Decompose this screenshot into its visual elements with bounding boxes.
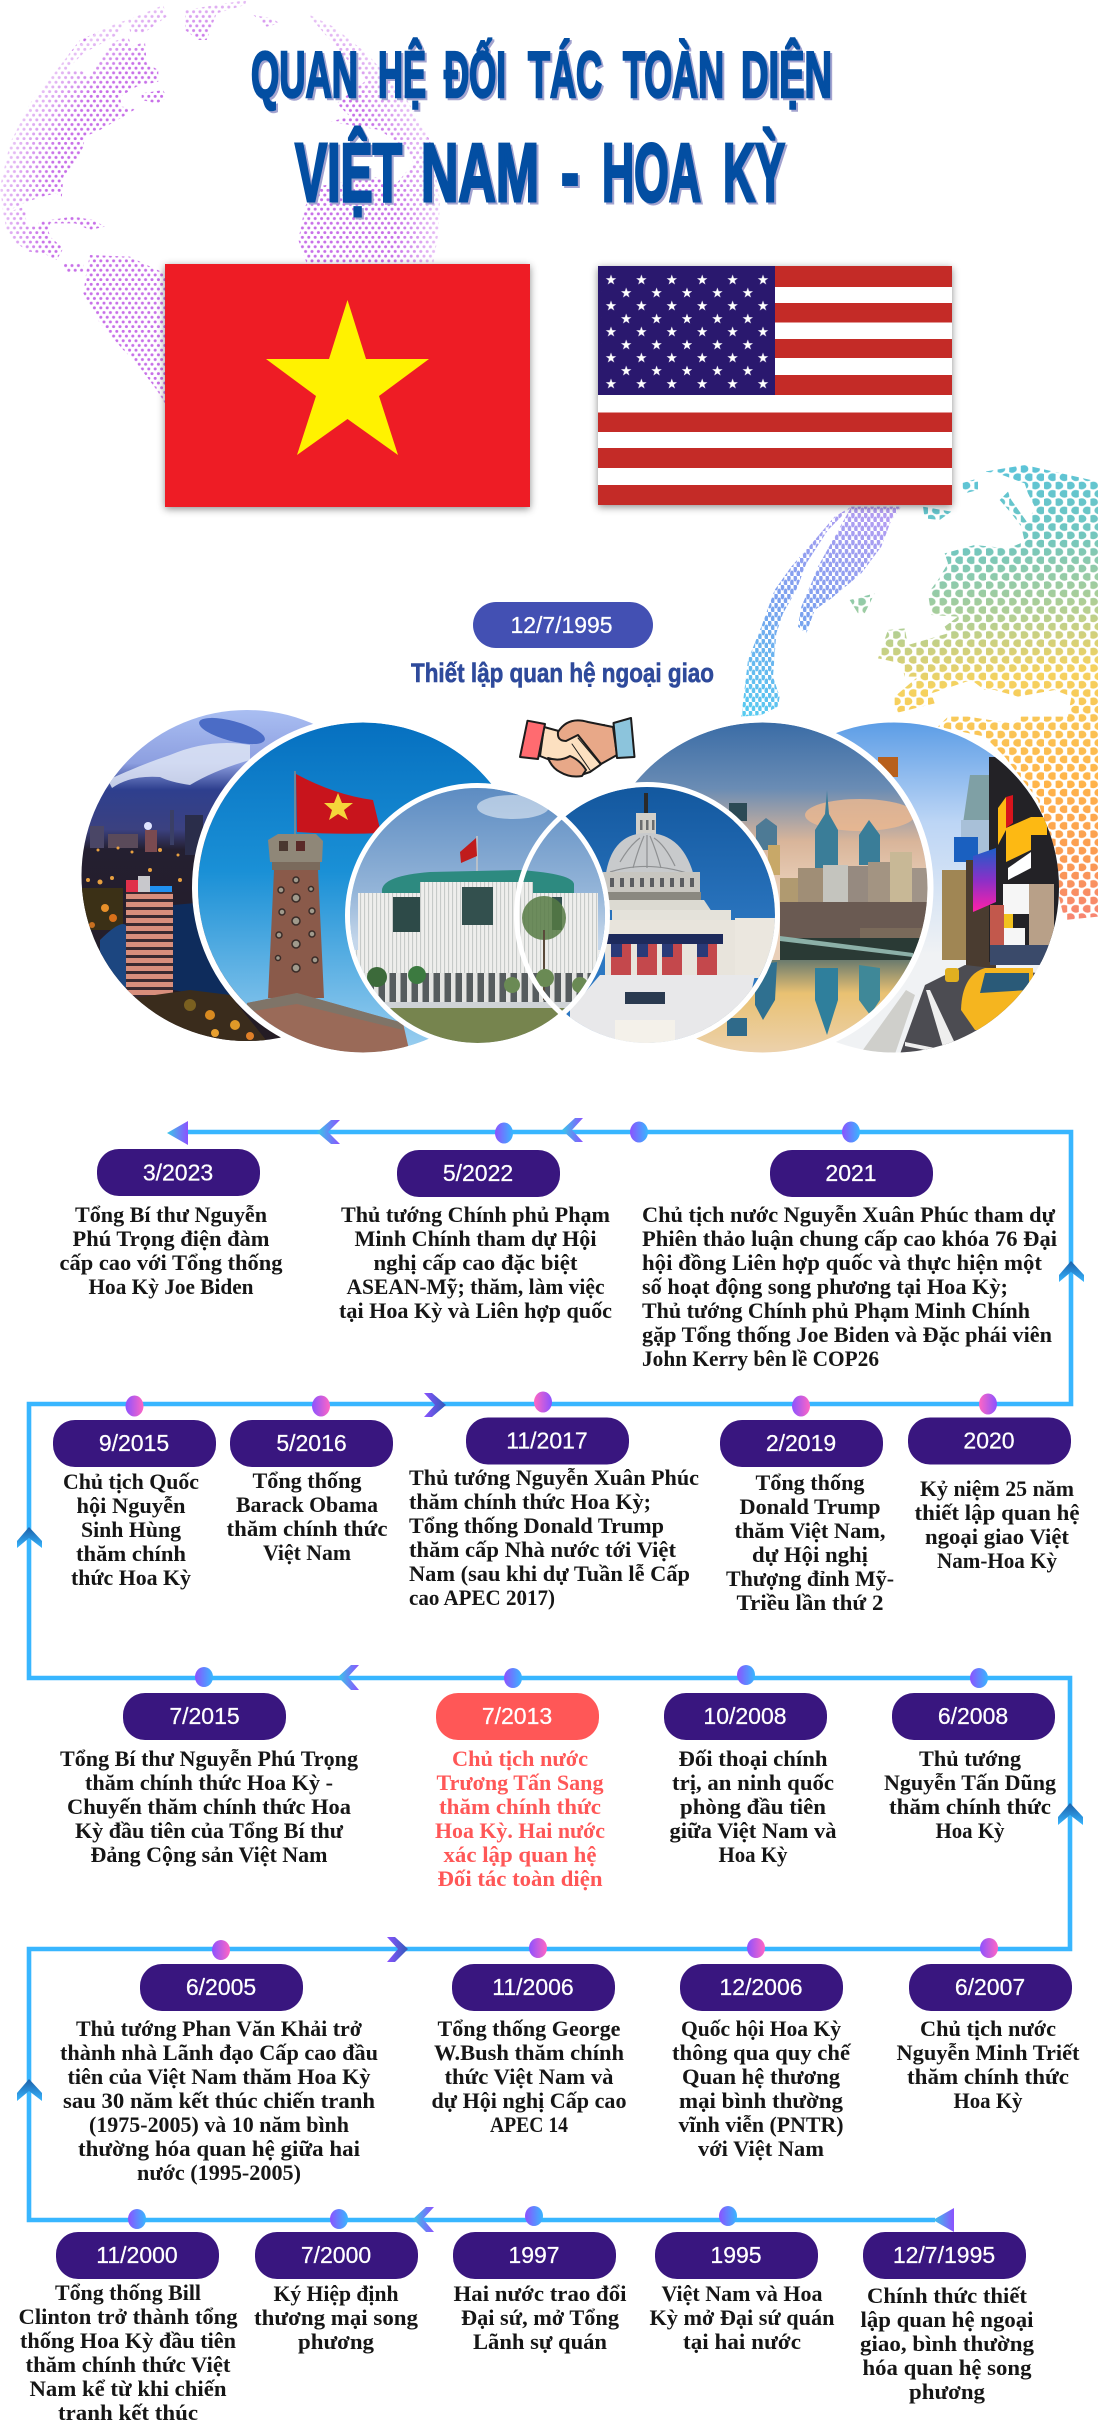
title: ĐỐI [444,38,506,111]
event: 11/2000: 11/2000 [96,2242,178,2268]
event: 10/2008: Hoa Kỳ [718,1842,788,1867]
timeline path [29,1121,1071,2232]
event: 6/2005: thành nhà Lãnh đạo Cấp cao đầu [60,2040,378,2065]
event: 2020: thiết lập quan hệ [914,1500,1080,1525]
event: 11/2017: Thủ tướng Nguyễn Xuân Phúc [409,1465,699,1490]
event: 7/2013 highlighted: thăm chính thức [439,1794,601,1819]
event: 6/2007: Chủ tịch nước [920,2016,1056,2041]
event: 5/2022: ASEAN-Mỹ; thăm, làm việc [346,1274,605,1299]
event: 2020: ngoại giao Việt [925,1524,1070,1549]
event: 7/2000: 7/2000 [301,2242,371,2268]
title: HOA [602,126,701,219]
event: 6/2005: Thủ tướng Phan Văn Khải trở [76,2016,363,2041]
event: 6/2005: sau 30 năm kết thúc chiến tranh [63,2088,375,2113]
icon: handshake [520,718,634,776]
event: 12/7/1995: 12/7/1995 [893,2242,995,2268]
event: 12/7/1995: Chính thức thiết [867,2283,1028,2308]
event: 11/2000: thống Hoa Kỳ đầu tiên [20,2328,236,2353]
event: 7/2015 [60,1693,358,1867]
event: 5/2016: Tổng thống [252,1468,362,1493]
event: 11/2000: Tổng thống Bill [55,2280,201,2305]
event: 9/2015 [53,1420,216,1590]
event: 2021: 2021 [825,1160,877,1186]
event: 2020: Nam-Hoa Kỳ [937,1548,1057,1573]
event: 12/2006: mại bình thường [679,2088,843,2113]
event: 11/2017: Nam (sau khi dự Tuần lễ Cấp [409,1561,690,1586]
event: 11/2017: thăm chính thức Hoa Kỳ; [409,1489,651,1514]
event: 10/2008: giữa Việt Nam và [670,1818,836,1843]
event: 9/2015: Chủ tịch Quốc [63,1469,199,1494]
event: 6/2007: 6/2007 [955,1974,1025,2000]
event: 5/2022: nghị cấp cao đặc biệt [374,1250,578,1275]
event: 1997: Lãnh sự quán [473,2329,607,2354]
event: 2021: Chủ tịch nước Nguyễn Xuân Phúc tham dự [642,1202,1056,1227]
event: 6/2005 [60,1964,378,2185]
event: 5/2022: tại Hoa Kỳ và Liên hợp quốc [339,1298,612,1323]
arrow: start head row 1 [167,1121,188,1145]
event: 11/2017: Tổng thống Donald Trump [409,1513,664,1538]
event: 7/2013 highlighted: Đối tác toàn diện [438,1866,602,1891]
event: 5/2016: thăm chính thức [226,1516,388,1541]
event: 2/2019: Donald Trump [740,1494,880,1519]
event: 7/2000: Ký Hiệp định [274,2281,398,2306]
event: 7/2013 highlighted: xác lập quan hệ [444,1842,597,1867]
event: 6/2007: Nguyễn Minh Triết [896,2040,1080,2065]
date pill: 12/7/1995: 12/7/1995 [510,612,612,638]
event: 7/2013 highlighted: Chủ tịch nước [452,1746,588,1771]
event: 9/2015: thức Hoa Kỳ [71,1565,191,1590]
event: 9/2015: Sinh Hùng [81,1517,181,1542]
photo rings [348,784,778,1046]
event: 12/7/1995: hóa quan hệ song [862,2355,1032,2380]
photo: US Capitol [562,787,775,1043]
event: 2021: John Kerry bên lề COP26 [642,1346,879,1371]
event: 12/2006: thông qua quy chế [672,2040,851,2065]
flag: United States [598,266,952,505]
photo: Vietnam National Assembly [350,788,606,1044]
event: 11/2000: Clinton trở thành tổng [18,2304,237,2329]
photo ring [195,720,531,1056]
event: 11/2006: 11/2006 [492,1974,574,2000]
event: 2021: hội đồng Liên hợp quốc và thực hiện một [642,1250,1043,1275]
event: 5/2016 [226,1420,393,1565]
event: 2/2019: dự Hội nghị [752,1542,868,1567]
chevrons along timeline [17,1118,1084,2232]
event: 12/7/1995: lập quan hệ ngoại [860,2307,1034,2332]
event: 11/2006: Tổng thống George [438,2016,621,2041]
event: 1997: 1997 [508,2242,560,2268]
event: 7/2015: Kỳ đầu tiên của Tổng Bí thư [75,1818,344,1843]
event: 10/2008: 10/2008 [703,1703,787,1729]
event: 12/7/1995 [860,2232,1034,2404]
event: 2/2019: Thượng đỉnh Mỹ- [726,1566,894,1591]
title: - [561,126,579,219]
title: VIỆT [295,126,402,219]
event: 2/2019: 2/2019 [766,1430,836,1456]
event: 6/2008: thăm chính thức [889,1794,1051,1819]
event: 12/2006: Quan hệ thương [682,2064,840,2089]
event: 9/2015: hội Nguyễn [76,1493,186,1518]
event: 7/2000 [254,2232,418,2354]
event: 12/2006: vĩnh viễn (PNTR) [678,2112,844,2137]
event: 1997 [453,2232,626,2354]
title: TOÀN [623,38,724,111]
event: 6/2005: nước (1995-2005) [137,2160,301,2185]
event: 9/2015: 9/2015 [99,1430,169,1456]
event: 5/2022 [339,1150,612,1323]
event: 2/2019: Tổng thống [756,1470,864,1495]
background dotted globe: purple [0,0,440,404]
event: 6/2008 [884,1693,1056,1843]
event: 11/2006: dự Hội nghị Cấp cao [432,2088,626,2113]
event: 1995: tại hai nước [683,2329,801,2354]
event: 7/2013 highlighted: Hoa Kỳ. Hai nước [435,1818,605,1843]
event: 9/2015: thăm chính [76,1541,186,1566]
event: 11/2017: cao APEC 2017) [409,1585,555,1610]
timeline dots [126,1122,998,2229]
event: 11/2000 [18,2232,237,2425]
photo: Philadelphia skyline [632,722,928,1052]
event: 12/7/1995: giao, bình thường [860,2331,1034,2356]
event: 6/2005: thường hóa quan hệ giữa hai [78,2136,360,2161]
event: 10/2008: Đối thoại chính [678,1746,828,1771]
title: NAM [421,126,539,219]
flag: Vietnam [165,264,530,507]
event: 6/2005: tiên của Việt Nam thăm Hoa Kỳ [68,2064,370,2089]
event: 7/2015: Đảng Cộng sản Việt Nam [90,1842,328,1867]
event: 7/2015: 7/2015 [169,1703,240,1729]
event: 1997: Hai nước trao đổi [454,2281,626,2306]
photo ring [594,720,930,1056]
event: 6/2008: Hoa Kỳ [936,1818,1004,1843]
event: 10/2008 [664,1693,836,1867]
event: 5/2022: Thủ tướng Chính phủ Phạm [341,1202,610,1227]
event: 2021 [642,1150,1057,1371]
event: 11/2006 [432,1964,626,2137]
event: 3/2023: Hoa Kỳ Joe Biden [88,1274,254,1299]
event: 5/2016: 5/2016 [276,1430,347,1456]
event: 2021: Thủ tướng Chính phủ Phạm Minh Chính [642,1298,1030,1323]
event: 6/2008: Thủ tướng [919,1746,1021,1771]
event: 6/2005: (1975-2005) và 10 năm bình [89,2112,349,2137]
event: 2/2019: thăm Việt Nam, [734,1518,886,1543]
event: 12/2006 [672,1964,851,2161]
subheading: Thiết lập quan hệ ngoại giao [411,658,714,688]
event: 7/2013 highlighted: Trương Tấn Sang [436,1770,604,1795]
event: 2020 [908,1418,1080,1573]
event: 2/2019 [720,1420,894,1615]
event: 1995: Việt Nam và Hoa [662,2281,822,2306]
event: 5/2022: Minh Chính tham dự Hội [354,1226,596,1251]
background dotted globe: multicolour [741,465,1098,920]
event: 7/2000: phương [298,2329,374,2354]
event: 2/2019: Triều lần thứ 2 [736,1590,884,1615]
event: 6/2007: thăm chính thức [907,2064,1069,2089]
event: 7/2013 highlighted: 7/2013 [482,1703,552,1729]
event: 11/2017: 11/2017 [506,1428,588,1454]
event: 1995: Kỳ mở Đại sứ quán [650,2305,834,2330]
event: 11/2017: thăm cấp Nhà nước tới Việt [409,1537,677,1562]
title: QUAN [251,38,358,111]
event: 11/2006: W.Bush thăm chính [434,2040,624,2065]
event: 1995: 1995 [710,2242,762,2268]
event: 2021: gặp Tổng thống Joe Biden và Đặc phái viên [642,1322,1052,1347]
event: 7/2000: thương mại song [254,2305,418,2330]
event: 6/2007 [896,1964,1080,2113]
event: 12/2006: Quốc hội Hoa Kỳ [681,2016,841,2041]
event: 6/2007: Hoa Kỳ [954,2088,1022,2113]
arrow: end head row 5 [933,2208,954,2232]
event: 7/2015: thăm chính thức Hoa Kỳ - [85,1770,333,1795]
event: 2020: Kỷ niệm 25 năm [920,1476,1074,1501]
event: 11/2000: thăm chính thức Việt [26,2352,231,2377]
title [251,38,832,219]
event: 10/2008: phòng đầu tiên [680,1794,826,1819]
title: TÁC [528,38,602,111]
event: 11/2000: Nam kể từ khi chiến [30,2376,226,2401]
event: 11/2000: tranh kết thúc [58,2400,198,2425]
title: DIỆN [741,38,832,111]
photo: Hanoi flag tower [198,722,496,1052]
event: 3/2023 [60,1149,282,1299]
event: 3/2023: 3/2023 [143,1160,213,1186]
event: 1997: Đại sứ, mở Tổng [461,2305,619,2330]
event: 2020: 2020 [963,1428,1015,1454]
event: 11/2006: APEC 14 [490,2112,568,2137]
event: 2021: Phiên thảo luận chung cấp cao khóa 76 Đại [642,1226,1057,1251]
event: 5/2016: Việt Nam [263,1540,351,1565]
photo: Hanoi night city [82,710,322,1041]
event: 5/2022: 5/2022 [443,1160,513,1186]
event: 6/2008: Nguyễn Tấn Dũng [884,1770,1056,1795]
event: 11/2006: thức Việt Nam và [444,2064,614,2089]
photo: Times Square [828,722,1059,1052]
event: 12/7/1995: phương [909,2379,985,2404]
title: HỆ [378,38,426,111]
date pill: 12/7/1995 [473,602,653,648]
event: 12/2006: với Việt Nam [698,2136,824,2161]
event: 7/2015: Chuyến thăm chính thức Hoa [67,1794,351,1819]
event: 3/2023: cấp cao với Tổng thống [60,1250,282,1275]
event: 7/2015: Tổng Bí thư Nguyễn Phú Trọng [60,1746,358,1771]
event: 6/2008: 6/2008 [938,1703,1008,1729]
event: 3/2023: Tổng Bí thư Nguyễn [75,1202,267,1227]
title: KỲ [723,126,785,219]
event: 5/2016: Barack Obama [236,1492,378,1517]
event: 6/2005: 6/2005 [186,1974,256,2000]
event: 2021: số hoạt động song phương tại Hoa Kỳ; [642,1274,1008,1299]
event: 1995 [650,2232,834,2354]
event: 11/2017 [409,1418,699,1610]
event: 10/2008: trị, an ninh quốc [672,1770,834,1795]
event: 3/2023: Phú Trọng điện đàm [72,1226,270,1251]
event: 12/2006: 12/2006 [719,1974,803,2000]
event: 7/2013 highlighted [435,1693,605,1891]
